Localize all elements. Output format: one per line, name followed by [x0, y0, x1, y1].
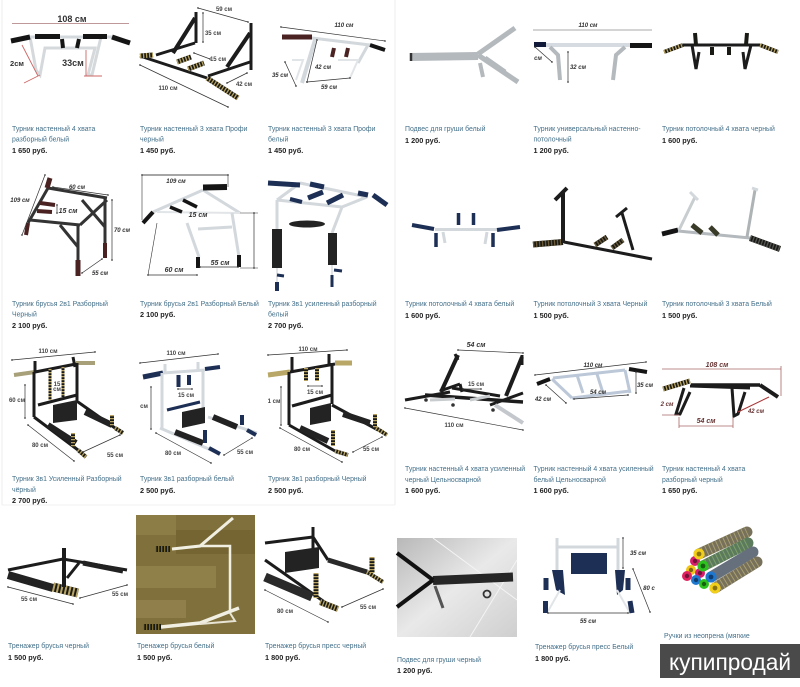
- product name: Турник потолочный 3 хвата Белый: [662, 300, 772, 308]
- product name: Турник настенный 4 хвата усиленный: [405, 466, 525, 473]
- product image: 42 см: [236, 82, 253, 88]
- price: 1 650 руб.: [662, 486, 697, 495]
- product name: Турник настенный 4 хвата: [12, 126, 95, 133]
- product image: 35 см: [637, 383, 654, 389]
- product image: [10, 175, 131, 277]
- product image: 54 см: [590, 390, 607, 396]
- product image: [268, 347, 387, 462]
- product image: [140, 7, 253, 107]
- product image: 55 см: [92, 271, 109, 277]
- product image: 80 см: [165, 451, 182, 457]
- price: 1 600 руб.: [405, 486, 440, 495]
- product name: белый: [268, 310, 288, 318]
- product image: 59 см: [321, 85, 338, 91]
- product: bars 2in1 white: [140, 175, 259, 319]
- price: 2 500 руб.: [140, 486, 175, 495]
- product image: 15 см: [59, 208, 78, 215]
- product image: [268, 183, 387, 291]
- product image: 60 см: [165, 267, 184, 274]
- product name: Турник настенный 3 хвата Профи: [268, 126, 375, 133]
- price: 1 600 руб.: [405, 311, 440, 320]
- product image: [546, 538, 655, 625]
- product name: Турник 3в1 Усиленный Разборный: [12, 476, 122, 483]
- product name: Тренажер брусья белый: [137, 642, 215, 650]
- product image: 80 с: [643, 586, 655, 592]
- product name: Подвес для груши белый: [405, 125, 486, 133]
- product image: [9, 349, 124, 461]
- product image: [272, 23, 385, 91]
- product: neoprene handles: [664, 532, 757, 640]
- product: ceiling bar 4 grips black: [662, 33, 778, 145]
- product image: 54 см: [467, 342, 486, 349]
- product: 3in1 white: [140, 351, 257, 495]
- price: 1 450 руб.: [268, 146, 303, 155]
- product image: 80 см: [277, 609, 294, 615]
- product name: Турник 3в1 усиленный разборный: [268, 301, 377, 308]
- product image: 2см: [10, 59, 24, 68]
- product: dip bars with press white: [535, 538, 655, 663]
- product image: 109 см: [10, 198, 30, 204]
- product image: 80 см: [32, 443, 49, 449]
- price: 1 800 руб.: [265, 653, 300, 662]
- product image: 54 см: [697, 418, 716, 425]
- product image: 15 см: [307, 390, 324, 396]
- product image: 55 см: [211, 260, 230, 267]
- product image: 55 см: [580, 619, 597, 625]
- product name: Турник 3в1 разборный белый: [140, 475, 234, 483]
- product name: Турник 3в1 разборный Черный: [268, 475, 367, 483]
- product image: [405, 342, 523, 430]
- product image: 42 см: [314, 65, 332, 71]
- product: wall bar 3 grips black: [140, 7, 253, 155]
- product image: 15 см: [189, 212, 208, 219]
- product image: 70 см: [114, 228, 131, 234]
- product name: Турник потолочный 4 хвата белый: [405, 300, 514, 308]
- price: 2 700 руб.: [268, 321, 303, 330]
- product image: 55 см: [363, 447, 380, 453]
- product: bars 2in1 black: [10, 175, 131, 330]
- product name: чёрный: [12, 486, 36, 494]
- icon: coloured neoprene tubes pyramid: [682, 532, 757, 594]
- product name: белый: [268, 136, 288, 144]
- price: 1 600 руб.: [662, 136, 697, 145]
- product image: см: [140, 404, 148, 410]
- product name: Турник настенный 3 хвата Профи: [140, 126, 247, 133]
- product: wall bar 4 grips black collapsible: [660, 362, 781, 495]
- product name: Ручки из неопрена (мягкие: [664, 633, 750, 640]
- product name: Турник брусья 2в1 Разборный Белый: [140, 300, 259, 308]
- product: universal wall-ceiling bar: [533, 23, 652, 155]
- product name: Турник потолочный 4 хвата черный: [662, 125, 775, 133]
- product image: 59 см: [216, 7, 233, 13]
- price: 1 500 руб.: [534, 311, 569, 320]
- product image: 110 см: [38, 349, 58, 355]
- product image: 1 см: [268, 399, 281, 405]
- product image: 55 см: [237, 450, 254, 456]
- product image: 110 см: [583, 363, 603, 369]
- product image: 55 см: [21, 597, 38, 603]
- product: 3in1 reinforced black: [9, 349, 124, 505]
- product image: [662, 188, 780, 249]
- watermark: купипродай: [660, 644, 800, 678]
- product photo: [397, 538, 517, 637]
- product image: 15 см: [468, 382, 485, 388]
- product: wall bar 4 grips reinforced white: [534, 362, 654, 495]
- product image: 42 см: [534, 397, 552, 403]
- product image: 33см: [62, 58, 84, 68]
- product image: 15: [54, 382, 61, 388]
- product: 3in1 reinforced white: [268, 183, 387, 330]
- product image: 42 см: [747, 409, 765, 415]
- product name: черный: [140, 136, 164, 144]
- product image: 55 см: [107, 453, 124, 459]
- product name: белый Цельносварной: [534, 476, 606, 484]
- product: punching bag mount white: [405, 28, 518, 145]
- price: 2 100 руб.: [140, 310, 175, 319]
- product: dip bars with press black: [265, 527, 383, 662]
- product image: [534, 362, 654, 403]
- product image: 80 см: [294, 447, 311, 453]
- product name: черный Цельносварной: [405, 476, 481, 484]
- product image: [10, 14, 130, 83]
- price: 1 650 руб.: [12, 146, 47, 155]
- product image: 55 см: [360, 605, 377, 611]
- product name: Тренажер брусья пресс черный: [265, 642, 366, 650]
- product image: 35 см: [630, 551, 647, 557]
- price: 2 100 руб.: [12, 321, 47, 330]
- product image: 109 см: [166, 179, 186, 185]
- watermark: купипродай: купипродай: [669, 649, 791, 675]
- product name: Турник универсальный настенно-: [534, 126, 641, 133]
- product: 3in1 black: [268, 347, 387, 495]
- price: 1 200 руб.: [405, 136, 440, 145]
- product: ceiling bar 3 grips white: [662, 188, 780, 320]
- price: 1 200 руб.: [534, 146, 569, 155]
- product image: 108 см: [57, 14, 87, 24]
- product image: [412, 213, 520, 247]
- product image: 2 см: [660, 402, 674, 408]
- product name: разборный черный: [662, 476, 723, 484]
- product photo on wooden floor: [136, 515, 255, 634]
- product: ceiling bar 4 grips white: [405, 213, 520, 320]
- product name: Турник брусья 2в1 Разборный: [12, 301, 108, 308]
- product name: разборный белый: [12, 136, 69, 144]
- product image: [664, 33, 778, 69]
- product: dip bars white (photo): [136, 515, 255, 662]
- product image: 15 см: [178, 393, 195, 399]
- product name: Турник настенный 4 хвата усиленный: [534, 466, 654, 473]
- price: 1 800 руб.: [535, 654, 570, 663]
- product image: 110 см: [578, 23, 598, 29]
- price: 2 700 руб.: [12, 496, 47, 505]
- price: 1 450 руб.: [140, 146, 175, 155]
- price: 1 200 руб.: [397, 666, 432, 675]
- price: 1 500 руб.: [137, 653, 172, 662]
- product image: [410, 28, 518, 82]
- product image: см: [534, 56, 542, 62]
- product name: Турник настенный 4 хвата: [662, 466, 745, 473]
- product image: [533, 188, 652, 259]
- product image: [533, 23, 652, 82]
- product image: 110 см: [334, 23, 354, 29]
- product name: Черный: [12, 310, 37, 318]
- product image: 108 см: [706, 362, 729, 369]
- product image: 32 см: [570, 65, 587, 71]
- product name: Подвес для груши черный: [397, 656, 481, 664]
- product image: 55 см: [112, 592, 129, 598]
- product image: 60 см: [9, 398, 26, 404]
- product name: Тренажер брусья пресс Белый: [535, 643, 633, 651]
- product: wall bar 4 grips reinforced black: [405, 342, 525, 495]
- product image: [142, 175, 258, 275]
- product image: 110 см: [444, 423, 464, 429]
- product: punching bag mount black (photo): [397, 538, 517, 675]
- product image: [8, 548, 129, 604]
- price: 1 500 руб.: [8, 653, 43, 662]
- product image: [660, 362, 781, 428]
- product image: 15 см: [210, 57, 227, 63]
- product name: Тренажер брусья черный: [8, 642, 89, 650]
- product image: 60 см: [69, 185, 86, 191]
- product image: [140, 351, 257, 463]
- product image: 110 см: [158, 86, 178, 92]
- product image: [265, 527, 383, 622]
- price: 2 500 руб.: [268, 486, 303, 495]
- product: ceiling bar 3 grips black: [533, 188, 652, 320]
- product image: см: [53, 387, 61, 393]
- product: wall bar 4 grips white: [10, 14, 130, 155]
- product image: 110 см: [166, 351, 186, 357]
- product image: 35 см: [272, 73, 289, 79]
- product: wall bar 3 grips white: [268, 23, 385, 155]
- product image: 35 см: [205, 31, 222, 37]
- product image: 110 см: [298, 347, 318, 353]
- product name: потолочный: [534, 136, 572, 144]
- price: 1 500 руб.: [662, 311, 697, 320]
- product: dip bars black: [8, 548, 129, 662]
- product name: Турник потолочный 3 хвата Черный: [534, 300, 647, 308]
- price: 1 600 руб.: [534, 486, 569, 495]
